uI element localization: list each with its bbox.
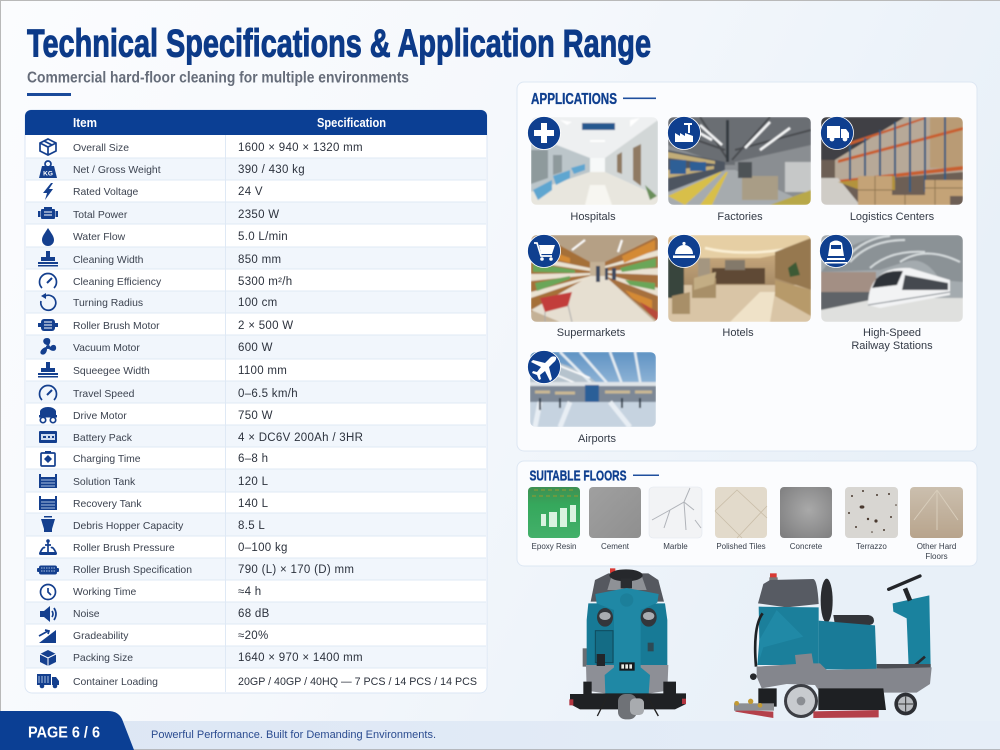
row: Roller Brush Specification: 790 (L) × 170 (D) mm [238, 564, 354, 576]
floor: Other Hard Floors: Floors [925, 552, 948, 561]
row: Noise [40, 606, 270, 622]
row: Container Loading: Container Loading [73, 677, 158, 688]
table header: Item [73, 116, 97, 130]
row: Squeegee Width: 1100 mm [238, 365, 287, 377]
icon: shopping cart [528, 234, 560, 268]
subtitle: Commercial hard-floor cleaning for multiple environments [27, 70, 409, 86]
icon: roller brush [37, 566, 59, 574]
row: Rated Voltage: 24 V [238, 186, 263, 198]
row: Cleaning Efficiency: Cleaning Efficiency [73, 277, 162, 288]
row: Overall Size: Overall Size [73, 143, 129, 154]
icon: speedometer [40, 385, 56, 400]
row: Travel Speed [40, 385, 298, 400]
icon: delivery truck [820, 116, 854, 150]
label: Airports [578, 433, 616, 445]
row: Cleaning Efficiency [40, 273, 292, 288]
floor: Concrete: Concrete [790, 542, 823, 551]
icon: fan [40, 338, 56, 355]
icon: truck [37, 674, 59, 688]
row: Net / Gross Weight [39, 161, 305, 178]
card: Factories [668, 116, 811, 223]
icon: slope [39, 630, 56, 643]
floor: Epoxy Resin [528, 487, 580, 551]
icon: medical cross [528, 116, 560, 150]
row: Vacuum Motor [40, 338, 273, 355]
row: Roller Brush Specification [37, 564, 354, 576]
icon: charger [41, 451, 55, 466]
floor: Marble: Marble [663, 542, 688, 551]
icon: speaker [40, 606, 56, 622]
row: Working Time [40, 584, 262, 600]
row: Drive Motor [39, 407, 273, 423]
row: Gradeability: Gradeability [73, 631, 129, 642]
row: Turning Radius: 100 cm [238, 297, 278, 309]
row: Overall Size [40, 139, 363, 155]
icon: box [40, 139, 56, 155]
icon: water drop [42, 228, 54, 246]
row: Roller Brush Motor: Roller Brush Motor [73, 321, 160, 332]
row: Total Power: 2350 W [238, 209, 279, 221]
floor: Terrazzo: Terrazzo [856, 542, 887, 551]
labels [851, 327, 933, 352]
row: Rated Voltage: Rated Voltage [73, 187, 139, 198]
icon: weight: KG [43, 170, 53, 178]
row: Recovery Tank: Recovery Tank [73, 499, 142, 510]
row: Solution Tank: Solution Tank [73, 477, 136, 488]
row: Gradeability [39, 630, 269, 643]
icon: turning arrow [41, 293, 56, 310]
title: Technical Specifications & Application Range [27, 22, 651, 66]
row: Rated Voltage [43, 183, 263, 200]
icon: clock [40, 584, 56, 600]
panel: suitable floors [517, 461, 977, 566]
icon: recovery tank [39, 496, 57, 510]
label: Supermarkets [557, 327, 626, 339]
row: Total Power: Total Power [73, 210, 128, 221]
card: Logistics Centers [820, 116, 963, 223]
row: Packing Size: Packing Size [73, 653, 133, 664]
row: Cleaning Width: 850 mm [238, 254, 281, 266]
row: Roller Brush Motor: 2 × 500 W [238, 320, 293, 332]
floor: Epoxy Resin: Epoxy Resin [532, 542, 576, 551]
row: Squeegee Width: Squeegee Width [73, 366, 150, 377]
row: Overall Size: 1600 × 940 × 1320 mm [238, 142, 363, 154]
row: Squeegee Width [38, 362, 287, 378]
icon: service bell [668, 234, 700, 268]
tagline: Powerful Performance. Built for Demanding Environments. [151, 729, 436, 741]
machine: front view [569, 568, 686, 719]
floor: Concrete [780, 487, 832, 551]
card: High-Speed Railway Stations [820, 234, 963, 352]
icon: weight [39, 161, 57, 178]
photo: hospital corridor [531, 117, 658, 205]
title accent rule [27, 93, 71, 96]
icon: hopper [41, 516, 55, 532]
photo: warehouse racks [821, 117, 963, 205]
icon: airplane [528, 350, 560, 384]
card: Hospitals [528, 116, 658, 223]
row: Vacuum Motor: Vacuum Motor [73, 343, 140, 354]
row: Debris Hopper Capacity: 8.5 L [238, 520, 265, 532]
icon: solution tank [39, 474, 57, 488]
machine: side view [734, 573, 932, 718]
floor: Polished Tiles [715, 487, 767, 551]
suitable floors heading: SUITABLE FLOORS [530, 468, 627, 484]
row: Drive Motor: Drive Motor [73, 411, 127, 422]
row: Debris Hopper Capacity: Debris Hopper Capacity [73, 521, 184, 532]
row: Gradeability: ≈20% [238, 630, 269, 642]
row: Roller Brush Pressure: 0–100 kg [238, 542, 288, 554]
row: Solution Tank: 120 L [238, 476, 269, 488]
row: Turning Radius: Turning Radius [73, 298, 143, 309]
row: Packing Size [40, 650, 363, 666]
icon: factory [668, 116, 700, 150]
floor: Other Hard Floors: Other Hard [917, 542, 956, 551]
row: Water Flow [42, 228, 288, 246]
row: Working Time: Working Time [73, 587, 137, 598]
icon: lightning bolt [43, 183, 53, 200]
photo: factory floor [668, 117, 811, 205]
icon: cleaning width [38, 251, 58, 266]
row: Cleaning Width: Cleaning Width [73, 255, 144, 266]
row: Charging Time [41, 451, 268, 466]
row: Total Power [38, 207, 279, 221]
row: Cleaning Width [38, 251, 281, 266]
card: Hotels [668, 234, 811, 339]
label: Logistics Centers [850, 211, 935, 223]
row: Battery Pack: Battery Pack [73, 433, 133, 444]
photo: hotel lobby [668, 235, 811, 322]
photo: airport terminal [530, 352, 656, 427]
page badge: PAGE 6 / 6 [28, 724, 100, 742]
icon: pressure [39, 539, 57, 555]
row: Battery Pack: 4 × DC6V 200Ah / 3HR [238, 432, 363, 444]
row: Travel Speed: 0–6.5 km/h [238, 388, 298, 400]
row: Container Loading: 20GP / 40GP / 40HQ — 7 PCS / 14 PCS / 14 PCS [238, 676, 477, 688]
label: Hotels [722, 327, 754, 339]
footer bar [0, 711, 1000, 750]
icon: gauge [40, 273, 56, 288]
panel: applications [517, 82, 977, 451]
icon: squeegee [38, 362, 58, 378]
row: Drive Motor: 750 W [238, 410, 273, 422]
floor: Terrazzo [845, 487, 898, 551]
row: Roller Brush Motor [38, 319, 293, 332]
floor: Cement: Cement [601, 542, 630, 551]
table header [25, 110, 487, 135]
label: Factories [717, 211, 763, 223]
row: Turning Radius [41, 293, 278, 310]
page badge [0, 711, 134, 750]
row: Water Flow: Water Flow [73, 232, 126, 243]
row: Water Flow: 5.0 L/min [238, 231, 288, 243]
icon: drive motor [39, 407, 57, 423]
icon: train [820, 234, 852, 268]
row: Debris Hopper Capacity [41, 516, 265, 532]
row: Recovery Tank [39, 496, 269, 510]
row: Vacuum Motor: 600 W [238, 342, 273, 354]
floor: Other Hard Floors [910, 487, 963, 561]
panel: specification table [25, 110, 487, 693]
row: Roller Brush Specification: Roller Brush Specification [73, 565, 192, 576]
photo: rail station [821, 235, 963, 322]
floor: Polished Tiles: Polished Tiles [716, 542, 766, 551]
row: Packing Size: 1640 × 970 × 1400 mm [238, 652, 363, 664]
labels: Railway Stations [851, 340, 933, 352]
icon: motor [38, 207, 58, 219]
row: Travel Speed: Travel Speed [73, 389, 135, 400]
row: Noise: 68 dB [238, 608, 270, 620]
floor: Marble [649, 487, 702, 551]
row: Noise: Noise [73, 609, 100, 620]
row: Container Loading [37, 674, 477, 688]
row: Net / Gross Weight: Net / Gross Weight [73, 165, 161, 176]
labels: High-Speed [863, 327, 921, 339]
card: Airports [528, 350, 656, 445]
row: Roller Brush Pressure [39, 539, 288, 555]
icon: battery [39, 431, 57, 443]
row: Roller Brush Pressure: Roller Brush Pressure [73, 543, 175, 554]
icon: package [40, 650, 56, 666]
card: Supermarkets [528, 234, 658, 339]
row: Charging Time: 6–8 h [238, 453, 268, 465]
label: Hospitals [570, 211, 616, 223]
icon: brush motor [38, 319, 58, 331]
photo: supermarket aisle [531, 235, 658, 322]
row: Recovery Tank: 140 L [238, 498, 269, 510]
applications heading: APPLICATIONS [531, 91, 617, 108]
row: Cleaning Efficiency: 5300 m²/h [238, 276, 292, 288]
row: Battery Pack [39, 431, 363, 444]
row: Solution Tank [39, 474, 269, 488]
row: Charging Time: Charging Time [73, 454, 141, 465]
row: Working Time: ≈4 h [238, 586, 262, 598]
table header: Specification [317, 116, 386, 130]
floor: Cement [589, 487, 641, 551]
row: Net / Gross Weight: 390 / 430 kg [238, 164, 305, 176]
